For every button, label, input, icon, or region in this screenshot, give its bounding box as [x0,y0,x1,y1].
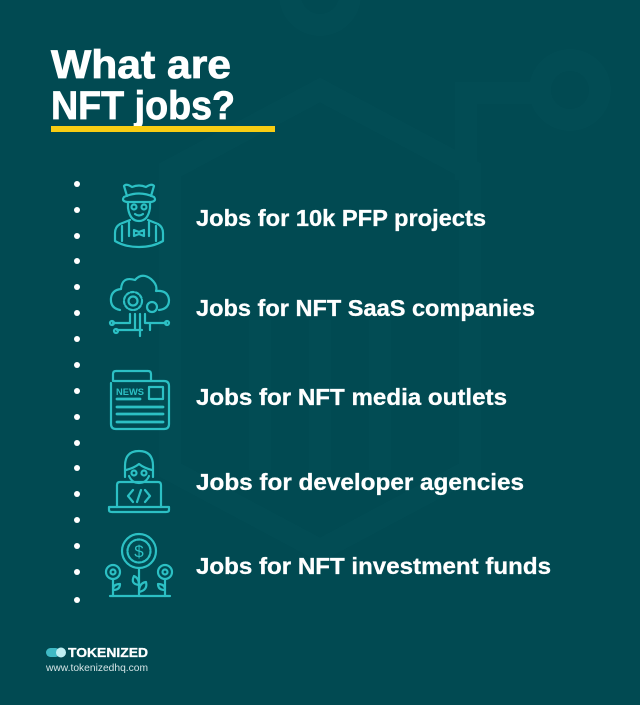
icon: cloud with gears and circuits [110,276,169,336]
text: SaaS companies: Jobs for NFT SaaS companies [196,295,535,321]
icon: character with hat [115,185,163,247]
text: media outlets: Jobs for NFT media outlets [196,384,507,410]
text: 10k PFP projects: Jobs for 10k PFP projects [196,205,486,231]
icon: money flowers [106,534,172,596]
text: investment funds: Jobs for NFT investment funds [196,553,551,579]
dotted vertical line [74,181,80,603]
icon: newspaper [111,371,169,429]
icon: money flowers: $ [134,542,144,561]
title: What are [51,43,231,87]
text: developer agencies: Jobs for developer agencies [196,469,524,495]
website url: www.tokenizedhq.com [45,662,148,674]
icon: developer at laptop [109,451,169,512]
title: NFT jobs? [51,84,235,128]
icon: newspaper: NEWS [116,387,144,397]
title underline [51,126,275,132]
title [51,43,235,128]
logo: Tokenized: TOKENIZED [68,645,148,660]
